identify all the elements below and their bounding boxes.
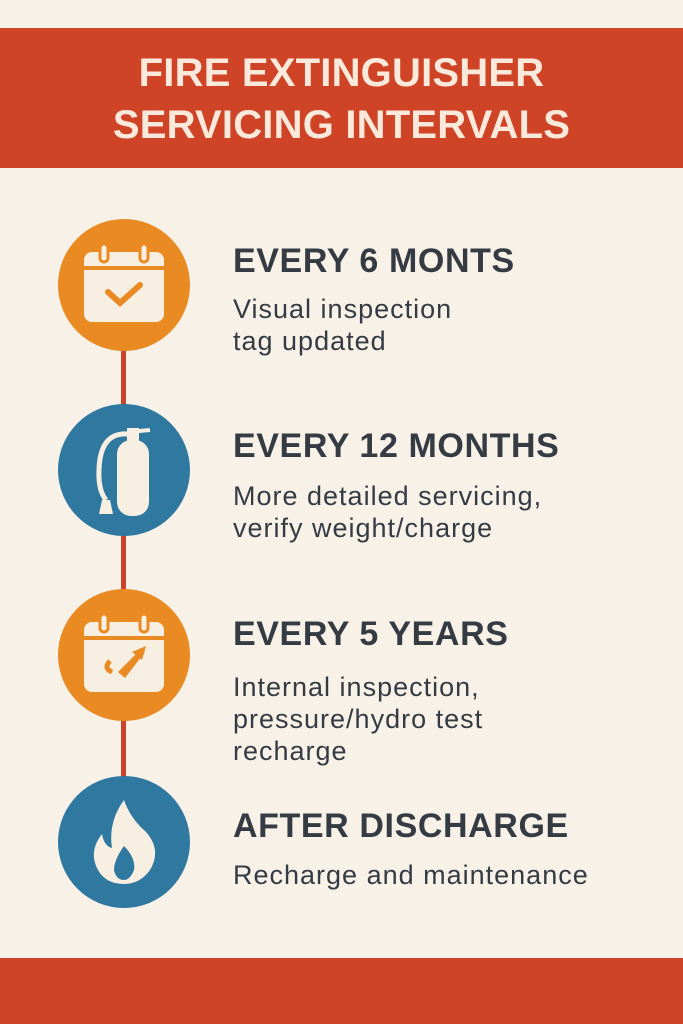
header band [0, 28, 683, 168]
item 3 text: Internal inspection, [233, 672, 480, 702]
footer band [0, 958, 683, 1024]
item 3 text [233, 672, 483, 766]
item 2 text [233, 481, 542, 543]
item 2 text: verify weight/charge [233, 513, 493, 543]
title [113, 51, 570, 147]
item 3 heading: EVERY 5 YEARS [233, 615, 509, 653]
item 1 text [233, 294, 452, 356]
item 3 text: pressure/hydro test [233, 704, 483, 734]
icon: flame [58, 776, 190, 908]
item 1 text: tag updated [233, 326, 387, 356]
item 3 text: recharge [233, 736, 348, 766]
item 2 heading: EVERY 12 MONTHS [233, 427, 559, 465]
item 4 heading: AFTER DISCHARGE [233, 807, 569, 845]
title: FIRE EXTINGUISHER [139, 51, 544, 95]
title: SERVICING INTERVALS [113, 103, 570, 147]
icon: calendar tool [58, 589, 190, 721]
item 4 text: Recharge and maintenance [233, 860, 589, 890]
item 1 heading: EVERY 6 MONTS [233, 242, 515, 280]
item 2 text: More detailed servicing, [233, 481, 542, 511]
icon: calendar check [58, 219, 190, 351]
item 1 text: Visual inspection [233, 294, 452, 324]
icon: extinguisher [58, 404, 190, 536]
